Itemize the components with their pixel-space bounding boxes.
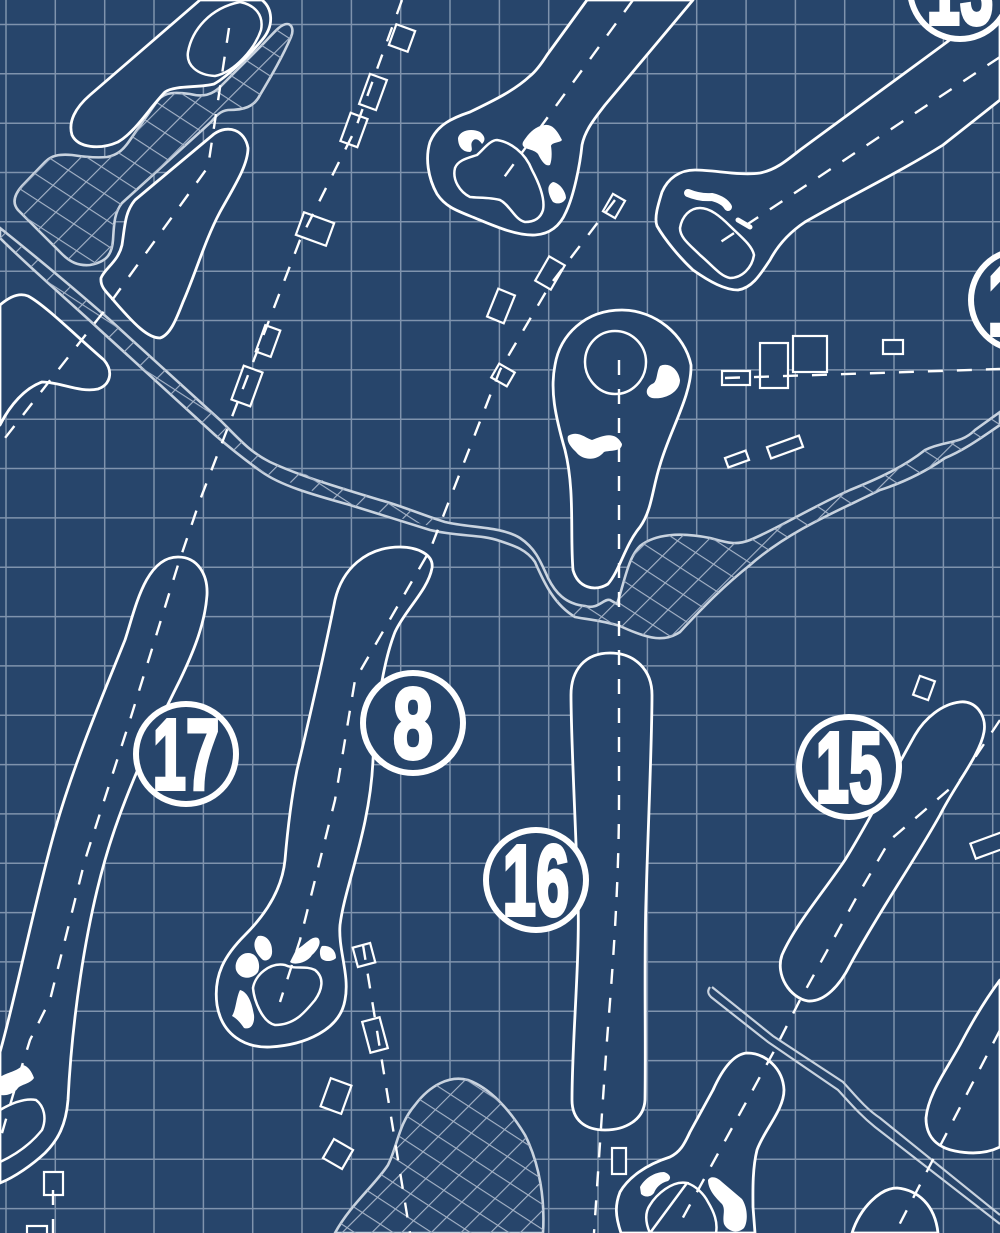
hole marker: 15 (796, 712, 902, 824)
bunkers: top right (688, 193, 750, 227)
hole marker: 16: 16 (503, 825, 569, 937)
bunkers: top center (458, 125, 566, 203)
bunkers: bottom center (640, 1172, 747, 1231)
bunkers: center par 3 (568, 365, 680, 459)
creek: lower right (708, 987, 1000, 1224)
fairway: top center (428, 0, 693, 235)
fairway: left edge (0, 295, 110, 425)
green: center par 3 (585, 331, 646, 394)
green: top right (680, 208, 754, 278)
fairway: bottom right (852, 1188, 938, 1233)
fairway: bottom center (616, 1053, 784, 1233)
hole marker: 14 (968, 245, 1000, 357)
bunker: 17 (0, 1065, 34, 1095)
fairway: 15 (780, 702, 984, 1001)
hole marker: 16 (483, 825, 589, 937)
green: bottom center (646, 1183, 717, 1233)
hole marker: 17 (133, 699, 239, 811)
bunkers: 8 (232, 936, 336, 1028)
fairway: 17 (0, 557, 207, 1183)
hole marker: 15: 15 (816, 712, 882, 824)
hazard: bottom hatched wetland (335, 1079, 543, 1233)
fairway: center par 3 (553, 310, 691, 588)
hazard: central creek and wetland (0, 228, 1000, 638)
green: 17 (0, 1100, 44, 1162)
fairway: top left upper (71, 0, 271, 147)
hole marker: 8 (360, 668, 466, 780)
green: 8 (253, 965, 321, 1025)
fairway: right edge (926, 980, 1000, 1153)
fairway: 8 (216, 547, 432, 1047)
green: top left (188, 2, 262, 76)
hazard: top-left hatched wetland (15, 24, 292, 265)
fairway: top left lower (101, 129, 248, 338)
green: top center (454, 140, 543, 222)
fairway: 16 (571, 653, 652, 1130)
hole marker: 8: 8 (393, 668, 433, 780)
hole marker: 17: 17 (153, 699, 219, 811)
fairway: top right (656, 0, 1000, 290)
